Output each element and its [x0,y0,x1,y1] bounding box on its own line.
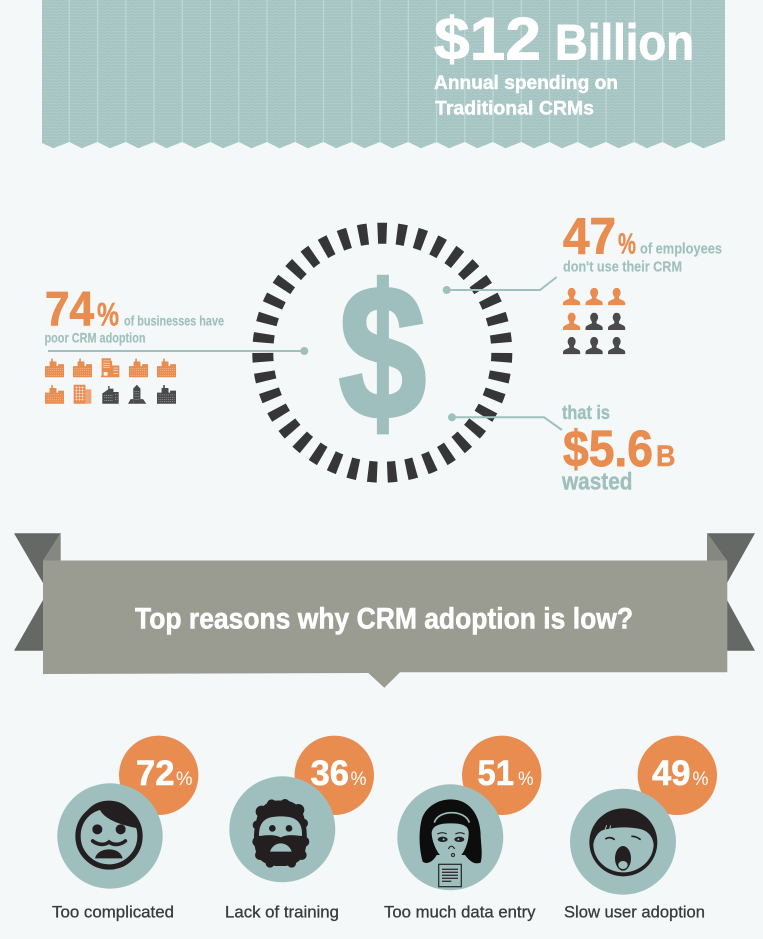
47 percent text: % [618,228,636,260]
percent badge: % [176,769,193,790]
74 percent text: of businesses have [124,313,224,329]
right stat: 47% [443,207,722,354]
right stat: $5.6B wasted [448,403,676,495]
label: Lack of training [225,902,339,921]
icon: girl with document [397,784,503,890]
dashed ring [258,229,506,477]
banner chevron shape [42,0,725,148]
icon: bearded face [229,776,335,882]
reason: too complicated [52,736,198,921]
74 percent text: % [97,297,119,333]
people icons [563,288,625,354]
headline: $12 Billion: $12 [434,6,541,72]
reason: slow user adoption [564,736,717,921]
connector line [448,413,562,430]
percent badge: 72 [136,754,174,793]
label: Too much data entry [384,902,536,921]
ribbon tails [14,533,755,651]
percent badge [638,736,717,815]
icon: yawning face [570,789,676,895]
icon: moustache face [57,783,163,889]
wasted amount text [561,403,676,495]
reason: lack of training [225,736,374,921]
74 percent text: 74 [45,284,94,337]
74 percent text: poor CRM adoption [44,330,146,346]
47 percent text: don't use their CRM [563,259,682,276]
percent badge [462,736,541,815]
connector line [443,277,557,294]
subtitle: annual spending: Traditional CRMs [435,98,594,120]
percent badge: % [692,769,709,790]
percent badge: % [350,769,367,790]
top banner: annual spending [42,0,725,148]
wasted amount text: B [656,440,676,473]
percent badge: 36 [310,754,349,793]
reason: too much data entry [384,736,541,921]
building icons [45,358,176,404]
ribbon heading [14,533,755,688]
headline: $12 Billion [434,6,694,72]
wasted amount text: wasted [561,468,632,495]
heading text: Top reasons why CRM adoption is low? [135,602,633,636]
headline: $12 Billion: Billion [555,14,694,70]
left stat: 74% [44,284,308,404]
big dollar sign: $ [339,247,426,459]
percent badge: 49 [652,754,690,793]
percent badge: 51 [478,754,514,793]
74 percent text [44,284,224,346]
percent badge: % [518,769,534,790]
47 percent text [563,207,722,276]
label: Too complicated [52,902,174,921]
47 percent text: of employees [640,240,722,257]
ribbon body [43,560,727,688]
label: Slow user adoption [564,902,705,921]
subtitle: annual spending [434,73,618,120]
wasted amount text: $5.6 [563,420,653,477]
connector line [48,347,308,355]
percent badge [119,736,198,815]
subtitle: annual spending: Annual spending on [434,73,618,94]
wasted amount text: that is [562,403,610,424]
percent badge [295,736,374,815]
47 percent text: 47 [563,207,616,264]
